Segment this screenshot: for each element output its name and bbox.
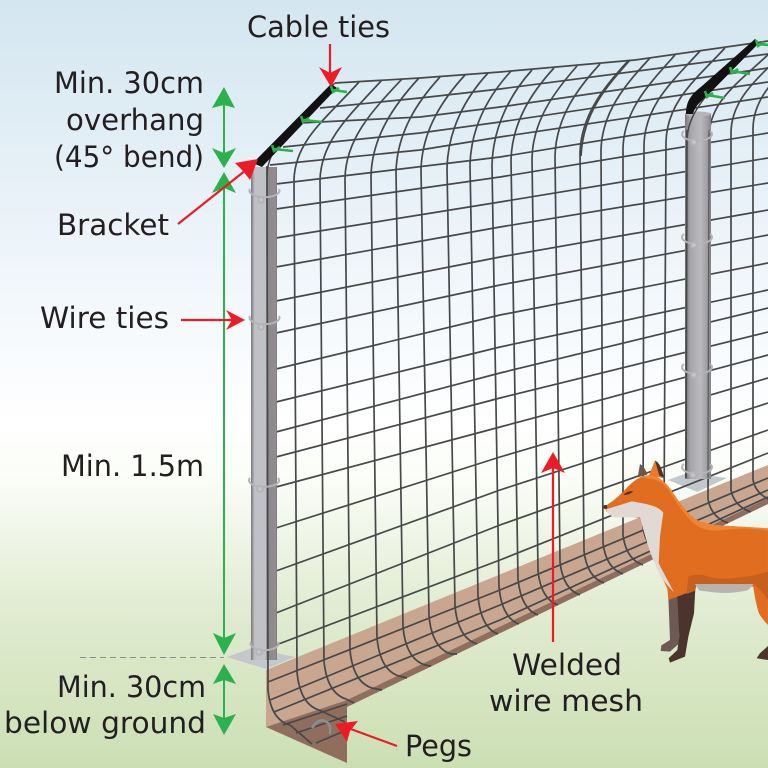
label: overhang: overhang — [66, 103, 204, 137]
label: cable ties: Cable ties — [247, 10, 390, 44]
first post — [251, 83, 335, 744]
fox body — [604, 475, 768, 625]
welded wire mesh — [268, 25, 768, 743]
fox rear legs — [757, 646, 768, 660]
trench — [266, 465, 768, 763]
label: overhang: (45° bend) — [54, 140, 204, 174]
fox back highlight — [640, 475, 768, 531]
overhang arrow — [212, 87, 236, 168]
label: pegs: Pegs — [405, 729, 472, 763]
arrow: wire ties — [181, 310, 245, 330]
red callout arrows — [178, 44, 565, 746]
fox chest — [606, 501, 674, 592]
first bracket — [253, 84, 337, 167]
second bracket — [686, 39, 759, 114]
arrow: bracket — [178, 159, 258, 224]
second post — [685, 42, 757, 479]
label: height: Min. 1.5m — [61, 449, 204, 483]
fox shaded flank — [687, 572, 768, 600]
label: overhang: Min. 30cm — [54, 66, 204, 100]
second post base plate — [668, 473, 727, 492]
fox nose — [603, 505, 607, 509]
arrow: welded wire mesh — [541, 452, 565, 642]
fox belly — [695, 584, 753, 593]
second bracket cable ties — [705, 40, 768, 98]
peg — [312, 720, 330, 734]
fox — [603, 461, 768, 663]
wire ties on first post — [249, 189, 280, 655]
label: welded wire mesh: wire mesh — [489, 684, 643, 718]
arrow: cable ties — [319, 44, 342, 87]
below ground arrow — [213, 664, 236, 735]
wire ties on second post — [682, 131, 712, 478]
label: bracket: Bracket — [57, 208, 169, 242]
first post base plate — [227, 648, 295, 669]
first bracket cable ties — [272, 86, 347, 151]
label: below ground — [4, 670, 206, 740]
fox ears — [638, 464, 647, 477]
label: below ground: Min. 30cm — [57, 670, 206, 704]
ground level dashed line — [80, 656, 224, 658]
label: welded wire mesh: Welded — [512, 648, 622, 682]
height arrow — [212, 172, 236, 655]
arrow: pegs — [335, 721, 397, 746]
label: wire ties: Wire ties — [40, 301, 169, 335]
green dimension arrows — [212, 87, 236, 735]
label: overhang — [54, 66, 204, 174]
label: below ground: below ground — [4, 706, 206, 740]
fox eye — [623, 491, 633, 495]
label: welded wire mesh — [489, 648, 643, 718]
